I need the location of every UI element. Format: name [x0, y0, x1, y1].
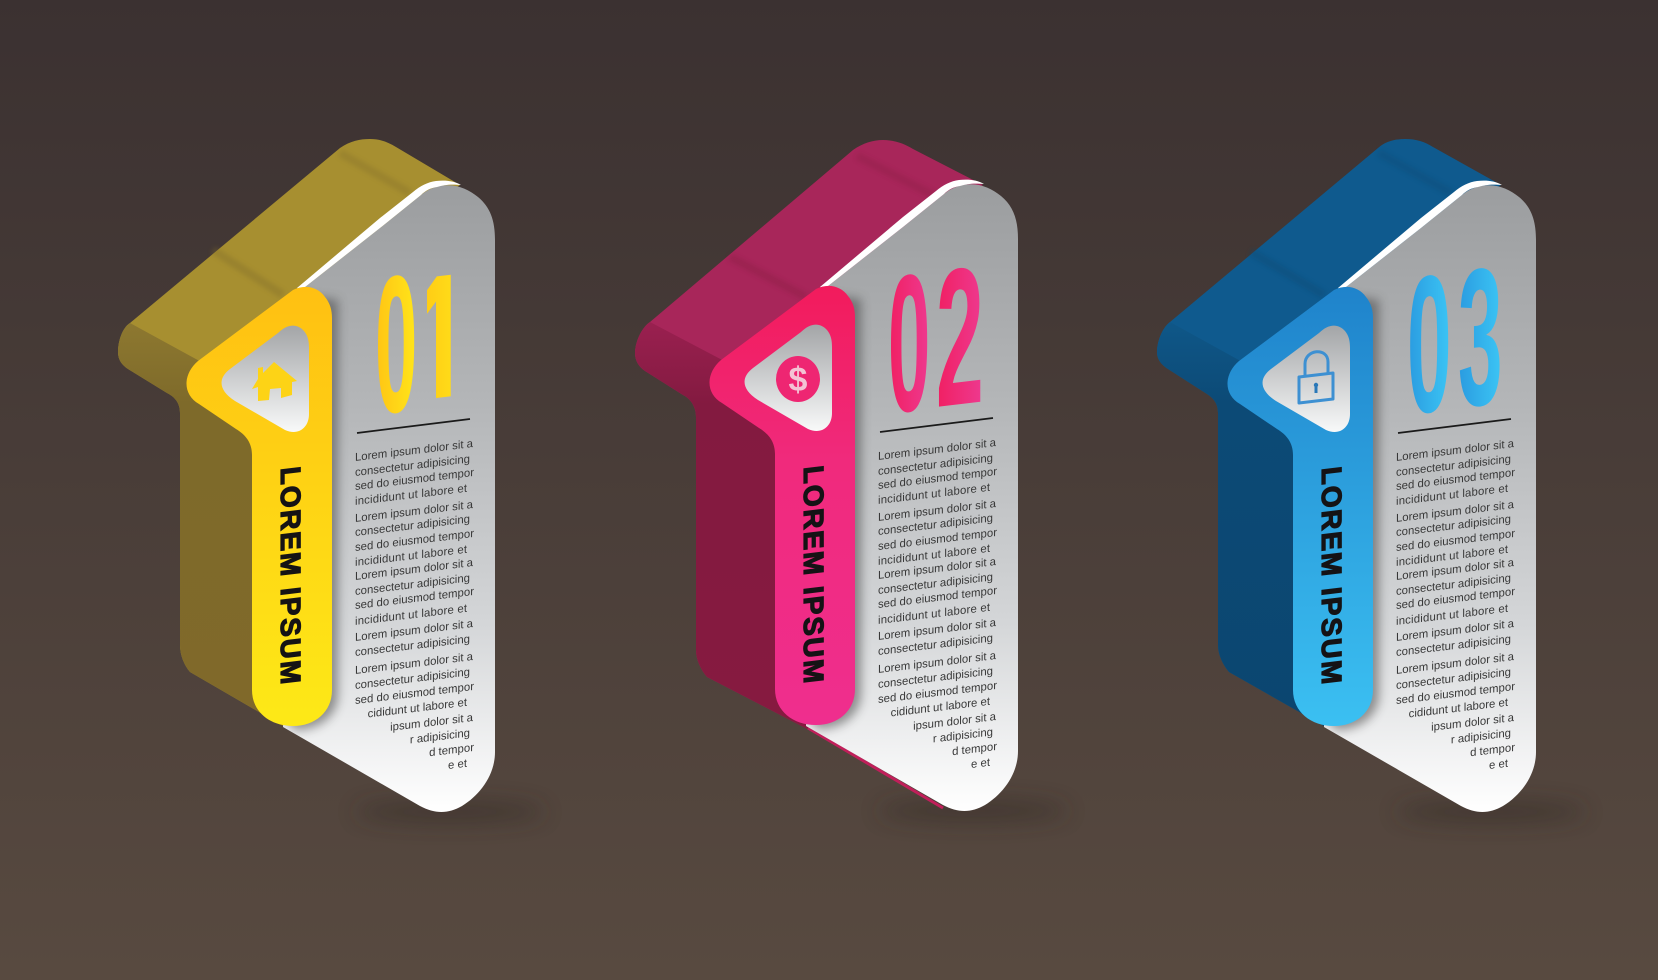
body text 01: incididunt ut labore et	[355, 483, 468, 508]
body text 03: consectetur adipisicing	[1396, 633, 1511, 659]
vertical label 02: LOREM IPSUM	[798, 464, 829, 685]
number 03: 3	[1458, 225, 1502, 449]
body text 01: Lorem ipsum dolor sit a	[355, 557, 474, 583]
body text 03: e et	[1489, 758, 1509, 772]
body text 01: r adipisicing	[410, 727, 470, 746]
body text 03: cididunt ut labore et	[1409, 697, 1509, 720]
body text 01: Lorem ipsum dolor sit a	[355, 438, 474, 464]
tab shadow 02	[793, 294, 861, 729]
body text 02: sed do eiusmod tempor	[878, 527, 997, 553]
body text 02: incididunt ut labore et	[878, 543, 991, 568]
body text 02: consectetur adipisicing	[878, 632, 993, 658]
3D back block 03	[1157, 139, 1501, 730]
white highlight edge 03	[1338, 181, 1502, 291]
icon: padlock	[1299, 352, 1333, 403]
body text 02: incididunt ut labore et	[878, 482, 991, 507]
body text 03: Lorem ipsum dolor sit a	[1396, 499, 1515, 525]
body text 01: Lorem ipsum dolor sit a	[355, 651, 474, 677]
colored tab 03	[1227, 287, 1373, 726]
body text 02: consectetur adipisicing	[878, 665, 993, 691]
body text 03: sed do eiusmod tempor	[1396, 681, 1515, 707]
3D back block 02	[635, 140, 983, 808]
body text 01: consectetur adipisicing	[355, 633, 470, 659]
body text 01: e et	[448, 758, 468, 772]
body text 03: Lorem ipsum dolor sit a	[1396, 651, 1515, 677]
body text 03: incididunt ut labore et	[1396, 603, 1509, 628]
divider 01	[357, 419, 470, 433]
body text 02: Lorem ipsum dolor sit a	[878, 650, 997, 676]
ground shadow 01	[355, 801, 545, 823]
colored tab 01	[186, 287, 332, 726]
body text 01: sed do eiusmod tempor	[355, 528, 474, 554]
number 03	[1407, 225, 1502, 456]
body text 03: Lorem ipsum dolor sit a	[1396, 438, 1515, 464]
panel: step 03	[1157, 139, 1586, 823]
body text 01: consectetur adipisicing	[355, 572, 470, 598]
body text 01: consectetur adipisicing	[355, 453, 470, 479]
body text 03: Lorem ipsum dolor sit a	[1396, 557, 1515, 583]
colored tab 02	[709, 286, 855, 725]
white highlight edge 01	[297, 181, 461, 291]
body text 01: sed do eiusmod tempor	[355, 467, 474, 493]
vertical label 03: LOREM IPSUM	[1316, 465, 1347, 686]
body text 01: incididunt ut labore et	[355, 544, 468, 569]
body text 03: sed do eiusmod tempor	[1396, 586, 1515, 612]
ground shadow 03	[1396, 801, 1586, 823]
body text 02: consectetur adipisicing	[878, 571, 993, 597]
number 02: 2	[936, 224, 984, 448]
body text 02: sed do eiusmod tempor	[878, 585, 997, 611]
body text 01: ipsum dolor sit a	[390, 712, 474, 734]
body text 03: ipsum dolor sit a	[1431, 712, 1515, 734]
body text 03: d tempor	[1470, 742, 1515, 759]
number 02	[888, 224, 984, 455]
tab shadow 03	[1311, 295, 1379, 730]
body text 01: incididunt ut labore et	[355, 603, 468, 628]
body text 02: consectetur adipisicing	[878, 512, 993, 538]
body text 02	[878, 437, 997, 782]
body text 03: consectetur adipisicing	[1396, 453, 1511, 479]
icon: dollar coin	[776, 356, 820, 402]
body text 01: cididunt ut labore et	[368, 697, 468, 720]
body text 02: Lorem ipsum dolor sit a	[878, 617, 997, 643]
body text 02: Lorem ipsum dolor sit a	[878, 437, 997, 463]
body text 03: incididunt ut labore et	[1396, 483, 1509, 508]
body text 03	[1396, 438, 1515, 783]
tab shadow 01	[270, 295, 338, 730]
body text 03: consectetur adipisicing	[1396, 572, 1511, 598]
body text 01: consectetur adipisicing	[355, 513, 470, 539]
body text 03: sed do eiusmod tempor	[1396, 528, 1515, 554]
body text 02: sed do eiusmod tempor	[878, 466, 997, 492]
body text 01	[355, 438, 474, 783]
gray card 03	[1324, 185, 1536, 812]
number 01	[378, 274, 451, 414]
divider 03	[1398, 419, 1511, 433]
panel: step 02	[635, 140, 1068, 822]
body text 03: Lorem ipsum dolor sit a	[1396, 618, 1515, 644]
gray card 02	[806, 184, 1018, 811]
icon panel 01	[222, 326, 309, 432]
body text 02: r adipisicing	[933, 726, 993, 745]
icon: dollar coin: $	[789, 361, 808, 399]
number 01: 0	[375, 234, 417, 456]
gray card 01	[283, 185, 495, 812]
body text 01: d tempor	[429, 742, 474, 759]
number 02: 0	[888, 233, 930, 455]
body text 03: incididunt ut labore et	[1396, 544, 1509, 569]
body text 02: cididunt ut labore et	[891, 696, 991, 719]
body text 02: Lorem ipsum dolor sit a	[878, 556, 997, 582]
white highlight edge 02	[820, 180, 984, 290]
body text 01: sed do eiusmod tempor	[355, 681, 474, 707]
icon: home	[252, 362, 297, 401]
body text 01: consectetur adipisicing	[355, 666, 470, 692]
body text 01: Lorem ipsum dolor sit a	[355, 499, 474, 525]
body text 03: sed do eiusmod tempor	[1396, 467, 1515, 493]
body text 03: consectetur adipisicing	[1396, 666, 1511, 692]
body text 02: Lorem ipsum dolor sit a	[878, 498, 997, 524]
number 03: 0	[1407, 232, 1451, 456]
body text 02: d tempor	[952, 741, 997, 758]
icon panel 03	[1263, 326, 1350, 432]
body text 02: consectetur adipisicing	[878, 452, 993, 478]
body text 02: incididunt ut labore et	[878, 602, 991, 627]
body text 03: consectetur adipisicing	[1396, 513, 1511, 539]
panel: step 01	[118, 139, 545, 823]
vertical label 01: LOREM IPSUM	[275, 465, 306, 686]
body text 02: sed do eiusmod tempor	[878, 680, 997, 706]
body text 02: e et	[971, 757, 991, 771]
body text 01: Lorem ipsum dolor sit a	[355, 618, 474, 644]
ground shadow 02	[878, 800, 1068, 822]
divider 02	[880, 418, 993, 432]
body text 02: ipsum dolor sit a	[913, 711, 997, 733]
number 01: 1	[411, 225, 471, 472]
body text 03: r adipisicing	[1451, 727, 1511, 746]
body text 01: sed do eiusmod tempor	[355, 586, 474, 612]
3D back block 01	[118, 139, 460, 730]
icon panel 02	[745, 325, 832, 431]
